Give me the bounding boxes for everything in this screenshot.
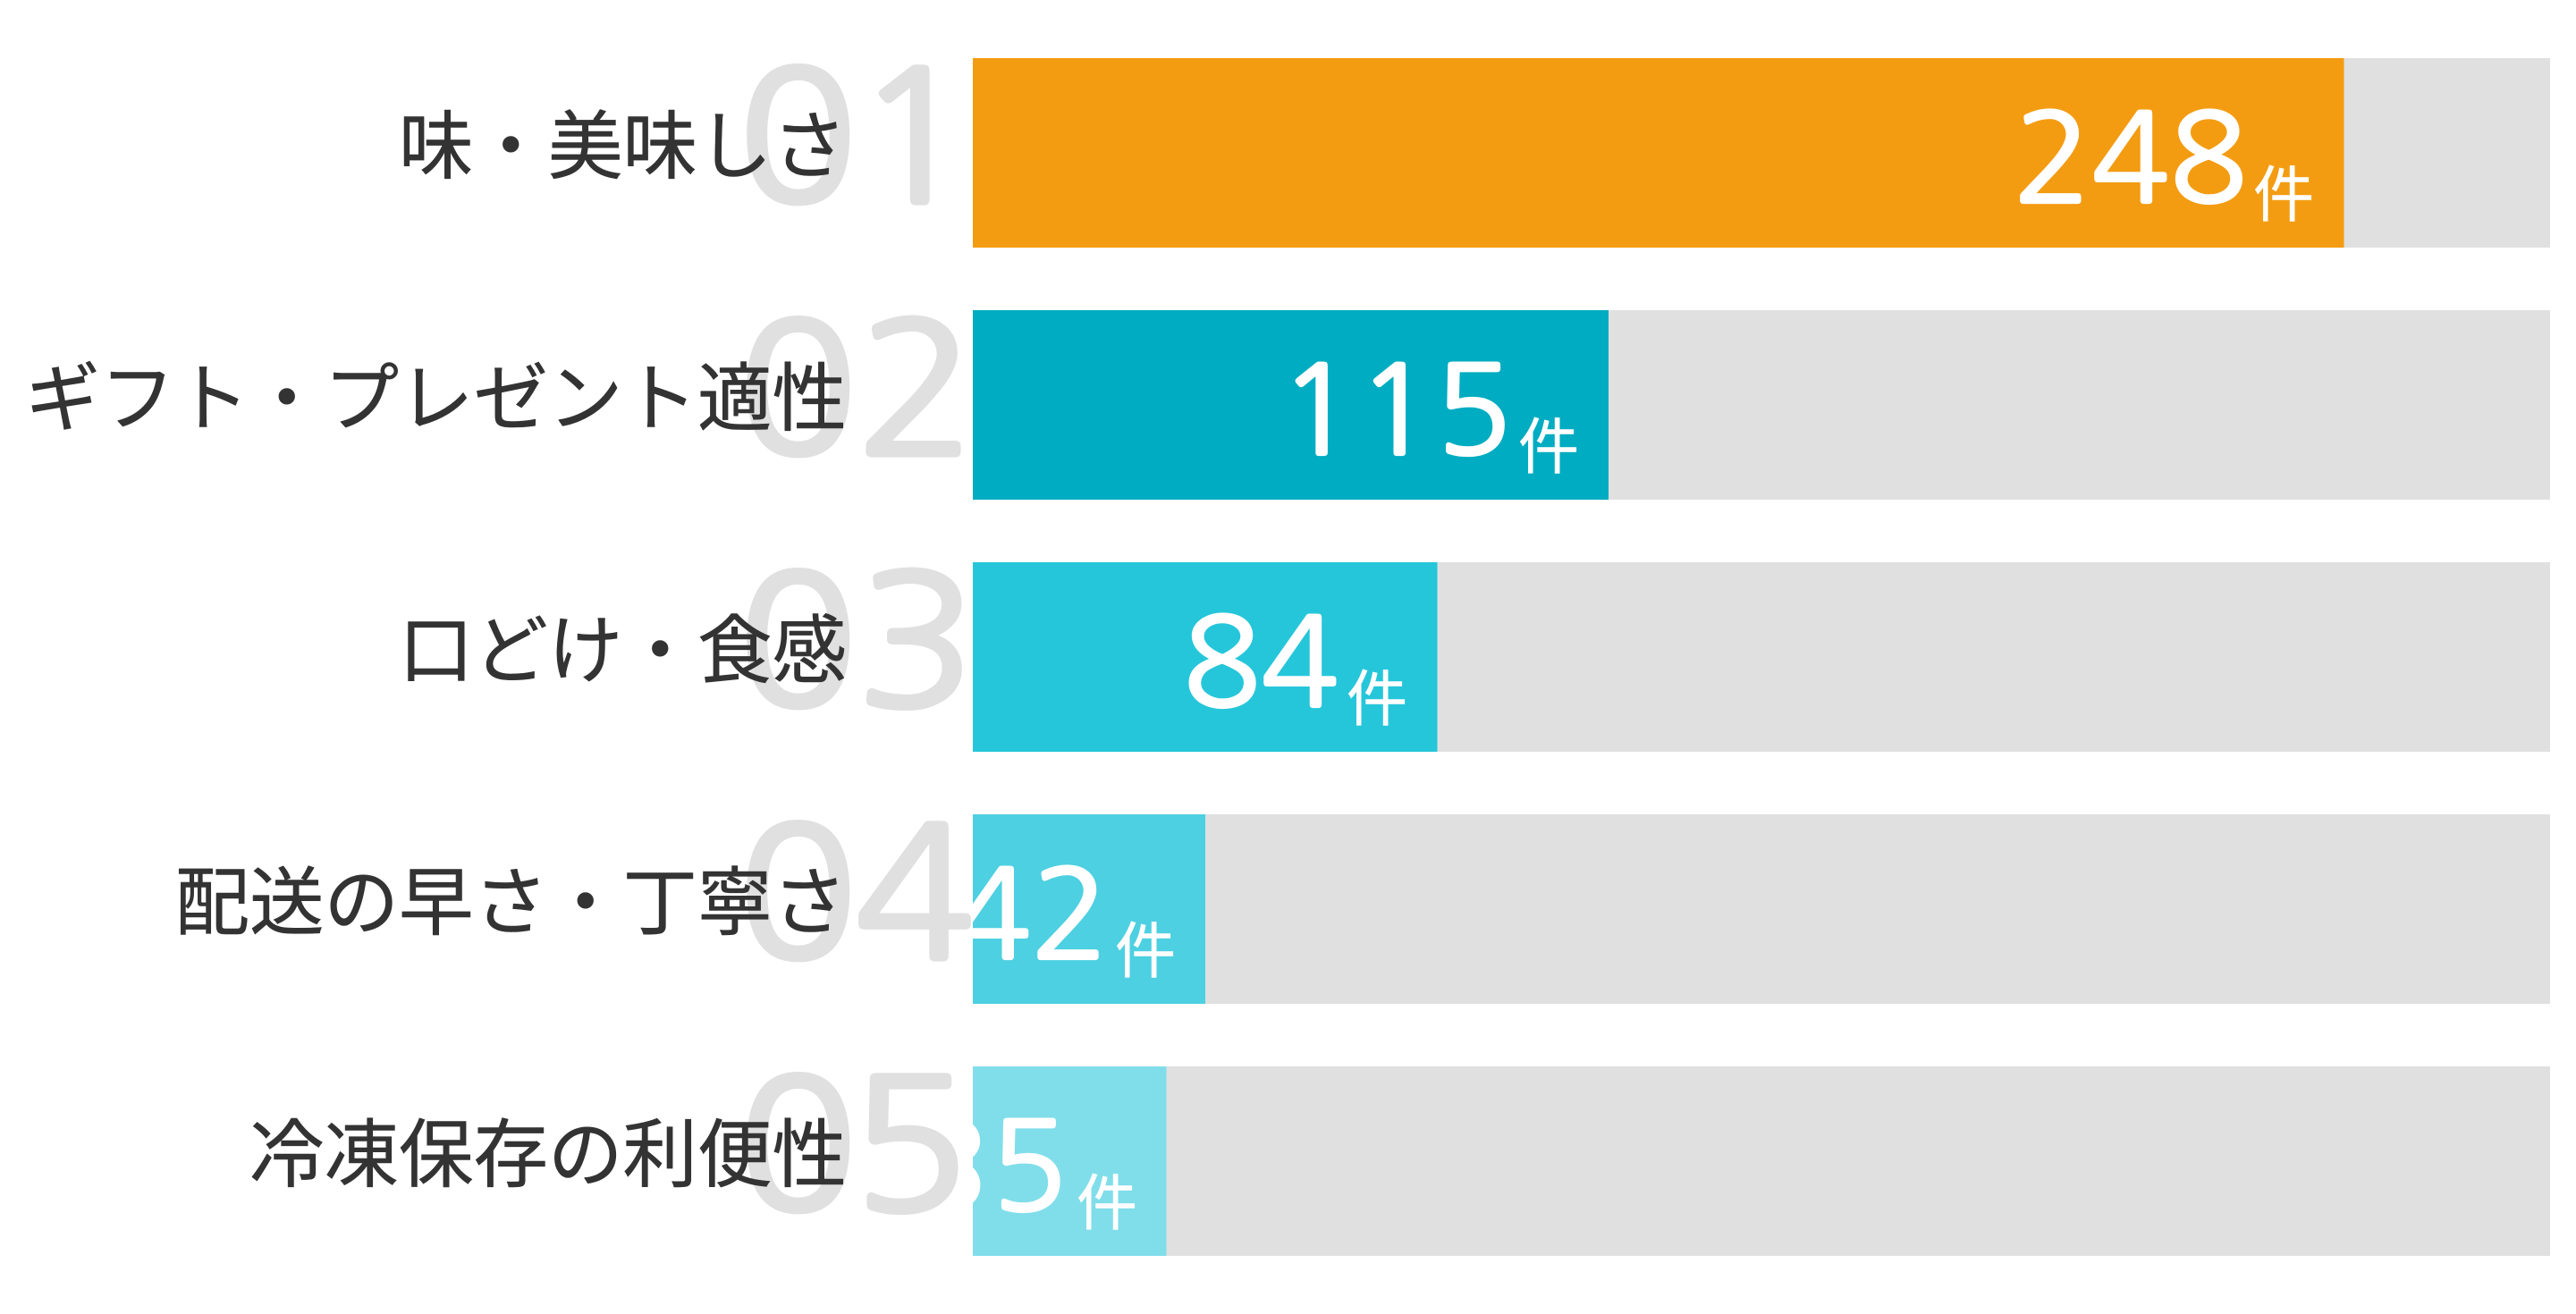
track 1 <box>973 58 2550 248</box>
row 3: texture <box>399 551 2550 752</box>
bar 2: 115: 件 <box>1518 414 1579 482</box>
bar 5: 35 <box>912 1066 1166 1256</box>
bar 5: 35: 件 <box>1077 1170 1137 1238</box>
bar 4: 42 <box>953 814 1205 1004</box>
bar 3: 84 <box>973 562 1438 752</box>
rank number 01: 01 <box>738 46 974 229</box>
bar 4: 42: 42 <box>953 855 1109 976</box>
row 5: frozen storage <box>249 1055 2550 1256</box>
row 4: delivery <box>175 803 2550 1004</box>
bar 5: 35: 35 <box>912 1107 1068 1228</box>
track 2 <box>973 310 2550 500</box>
rank number 05: 05 <box>738 1055 969 1237</box>
rank number 04: 04 <box>738 803 975 985</box>
bar 2: 115: 115 <box>1279 350 1512 472</box>
bar 3: 84: 件 <box>1347 666 1407 734</box>
rank number 02: 02 <box>738 299 976 481</box>
row 1: taste <box>399 46 2550 248</box>
bar 3: 84: 84 <box>1183 602 1339 724</box>
row 2: gift suitability <box>25 299 2550 500</box>
bar 1: 248: 件 <box>2253 162 2314 230</box>
track 3 <box>973 562 2550 752</box>
rank number 03: 03 <box>738 551 976 733</box>
label 2: ギフト・プレゼント適性 <box>25 357 847 441</box>
track 5 <box>973 1066 2550 1256</box>
label 4: 配送の早さ・丁寧さ <box>175 861 847 945</box>
bar 2: 115 <box>973 310 1609 500</box>
label 3: 口どけ・食感 <box>399 609 847 693</box>
bar 1: 248: 248 <box>2014 98 2247 220</box>
label 1: 味・美味しさ <box>399 105 847 189</box>
bar 1: 248 <box>973 58 2344 248</box>
track 4 <box>973 814 2550 1004</box>
label 5: 冷凍保存の利便性 <box>249 1113 847 1197</box>
bar 4: 42: 件 <box>1115 918 1176 986</box>
